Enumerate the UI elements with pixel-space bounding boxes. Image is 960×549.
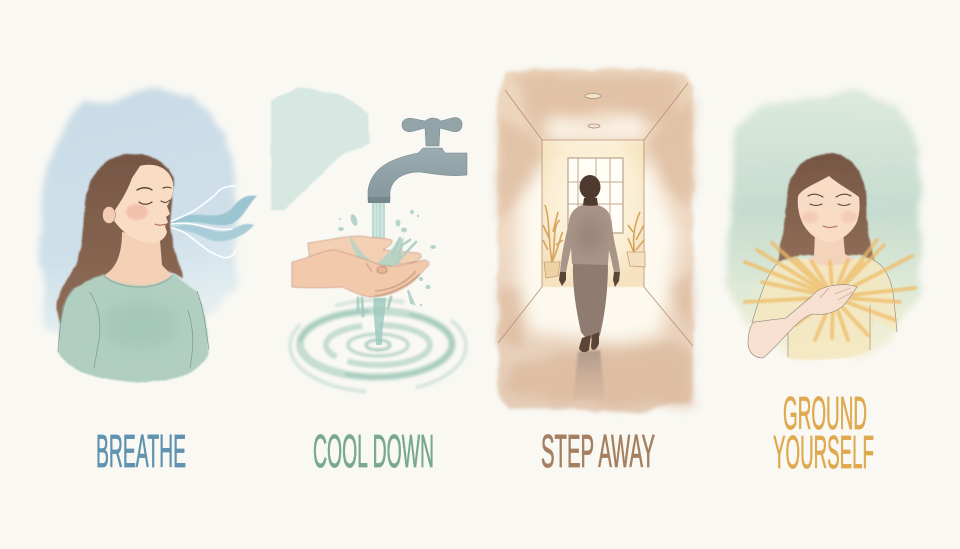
back wall	[542, 140, 644, 287]
darker wash patches	[498, 75, 693, 408]
yellow shirt	[752, 258, 897, 360]
neck	[802, 232, 862, 285]
breath swirls	[172, 186, 257, 258]
mint watercolor wash	[271, 87, 370, 210]
water splash in the hands	[350, 235, 404, 272]
finger lines	[366, 263, 420, 296]
faucet	[368, 117, 467, 203]
upper hand	[308, 236, 421, 268]
arm	[748, 285, 857, 358]
closed eyes, brows, nose and mouth	[137, 187, 171, 225]
text: COOL DOWN	[313, 425, 434, 477]
faucet handle	[402, 117, 462, 146]
corridor perspective lines	[498, 83, 693, 346]
cheek blush	[126, 204, 148, 220]
hands	[559, 272, 620, 287]
panel: step away illustration	[498, 68, 693, 412]
sun rays	[745, 240, 915, 340]
green to yellow watercolor wash	[727, 90, 920, 358]
ceiling lights	[585, 94, 601, 128]
green sweater	[58, 275, 209, 382]
tan watercolor wash	[498, 68, 693, 412]
shirt outline	[752, 260, 897, 357]
sweater shading and seams	[58, 275, 209, 368]
water stream	[372, 203, 386, 345]
blue watercolor wash	[38, 88, 236, 335]
sweater	[560, 205, 620, 272]
water droplets	[338, 210, 436, 322]
thumb	[377, 266, 387, 274]
woman facing forward	[745, 154, 915, 360]
water ripples	[290, 300, 466, 392]
hallway glow	[518, 165, 678, 342]
text: BREATHE	[96, 425, 186, 477]
panel: ground yourself illustration	[727, 90, 920, 360]
shoes	[579, 332, 599, 352]
title: ground yourself	[773, 387, 874, 478]
faucet body and spout	[368, 148, 467, 201]
legs	[573, 263, 608, 340]
cupped hands	[292, 235, 429, 297]
cheeks	[802, 211, 857, 223]
woman with long hair, profile	[57, 154, 209, 382]
panel: breathe illustration	[38, 88, 257, 382]
finger lines	[820, 288, 852, 300]
plants	[543, 205, 645, 278]
floor reflection	[573, 350, 605, 400]
neck	[104, 232, 172, 287]
sweater shading	[577, 218, 603, 252]
hair	[57, 154, 183, 325]
ear	[102, 206, 116, 224]
face	[798, 176, 860, 242]
text: STEP AWAY	[541, 425, 655, 477]
window	[568, 158, 623, 233]
ceiling glow	[545, 115, 645, 138]
hair	[778, 154, 874, 262]
face	[111, 165, 173, 243]
lower hand	[292, 250, 429, 297]
panel: cool down illustration	[271, 87, 467, 392]
closed eyes, brows, mouth	[808, 194, 851, 228]
walking figure seen from behind	[559, 175, 620, 352]
head	[580, 175, 600, 199]
